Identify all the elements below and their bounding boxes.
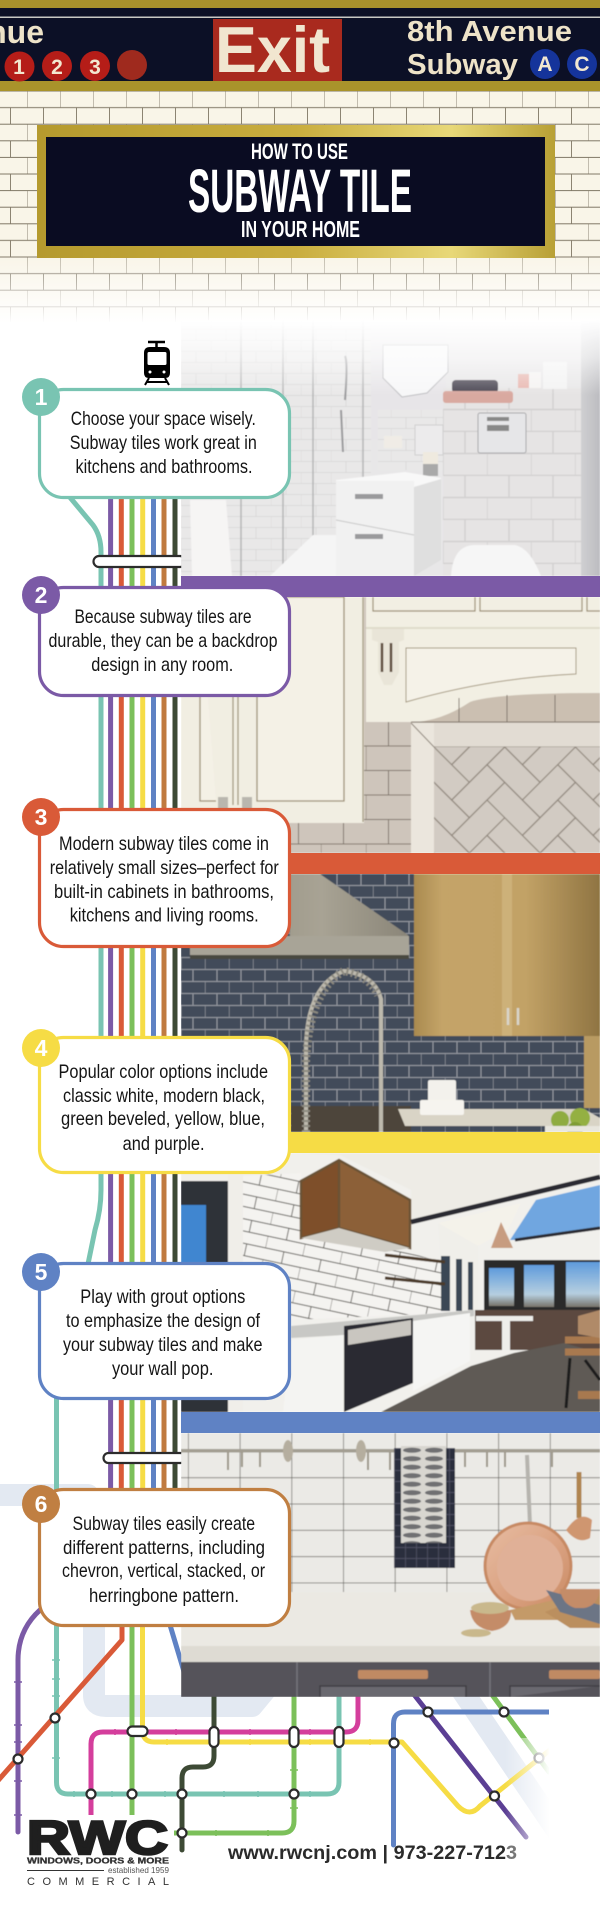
green diagonal (490, 1692, 549, 1772)
photo: bright kitchen with wood hood (181, 1153, 600, 1412)
callout 1 text: kitchens and bathrooms. (76, 456, 252, 478)
callout 6 (22, 1485, 290, 1626)
sign text: 8th Avenue Subway (407, 16, 572, 81)
callout 5 text: Play with grout options (80, 1286, 245, 1308)
route bullets A C: C (574, 53, 590, 76)
callout 4 text: green beveled, yellow, blue, (61, 1108, 265, 1130)
subway map lines (0, 495, 600, 1860)
callout 1 text (70, 408, 257, 478)
sign text: 8th Avenue Subway: 8th Avenue (407, 16, 572, 48)
blue right line (394, 1712, 549, 1845)
band: blue (181, 1412, 600, 1433)
callout 2 text (48, 606, 278, 676)
title (188, 139, 412, 242)
callout 5 text: your wall pop. (112, 1358, 213, 1380)
lower left teal loop (56, 1395, 339, 1794)
right side map fade (505, 1690, 600, 1860)
callout 5 text (63, 1286, 262, 1380)
band: red (181, 853, 600, 874)
badge 2: 2 (35, 582, 47, 608)
yellow line (142, 1620, 550, 1812)
route bullets A C (530, 49, 597, 79)
badge 5: 5 (35, 1259, 48, 1285)
panel: subway station header (0, 0, 600, 323)
callout 4 text: and purple. (123, 1133, 205, 1155)
band: purple (181, 576, 600, 597)
teal line (68, 495, 101, 1264)
badge 1: 1 (35, 384, 48, 410)
vertical line bundle (111, 495, 175, 1500)
callout 2 text: design in any room. (91, 654, 233, 676)
exit sign: Exit (215, 13, 330, 86)
photo: cream kitchen herringbone (181, 597, 600, 853)
purple left branch (18, 1610, 40, 1832)
pale map ribbons (0, 1495, 560, 1835)
route bullets 1 2 3: 1 (13, 56, 25, 79)
title: IN YOUR HOME (241, 216, 360, 242)
callout 2 text: durable, they can be a backdrop (48, 630, 278, 652)
route bullets 1 2 3: 2 (51, 56, 63, 79)
callout 6 text: Subway tiles easily create (73, 1513, 255, 1535)
title plaque (37, 125, 555, 258)
route bullets 1 2 3 (4, 50, 147, 82)
logo: RWC: WINDOWS, DOORS & MORE (27, 1856, 170, 1866)
green lower line (172, 1690, 294, 1833)
callout 3 (22, 798, 290, 946)
tiled wall background (0, 90, 600, 322)
dark green line (182, 1690, 214, 1850)
route bullets 1 2 3: 3 (89, 56, 101, 79)
callout 3 text: kitchens and living rooms. (70, 904, 259, 926)
callout 1 text: Choose your space wisely. (71, 408, 256, 430)
map tick marks (14, 1660, 370, 1836)
green vertical (130, 1620, 134, 1817)
callout 6 text: herringbone pattern. (89, 1585, 239, 1607)
callout 1 (22, 378, 290, 498)
route bullets A C: A (537, 53, 553, 76)
sign text: 8th Avenue Subway: Subway (407, 49, 518, 81)
badge 5 (22, 1253, 60, 1291)
station sign band (0, 0, 600, 91)
badge 3: 3 (35, 804, 47, 830)
callout 5 text: to emphasize the design of (66, 1310, 260, 1332)
callout 5 text: your subway tiles and make (63, 1334, 262, 1356)
callout 3 text: relatively small sizes–perfect for (50, 857, 279, 879)
callout 6 text: different patterns, including (63, 1537, 265, 1559)
callout 2 text: Because subway tiles are (74, 606, 252, 628)
logo: RWC: established 1959 (108, 1865, 169, 1875)
badge 6 (22, 1485, 60, 1523)
title: HOW TO USE (251, 139, 348, 164)
red diagonal (0, 1620, 122, 1784)
callout 4 text: classic white, modern black, (63, 1085, 265, 1107)
photo: slate subway tile kitchen (181, 874, 600, 1132)
band: yellow (181, 1132, 600, 1153)
interchange pill 1 (94, 556, 186, 567)
callout 6 text (62, 1513, 265, 1607)
callout 3 text: built-in cabinets in bathrooms, (54, 881, 274, 903)
interchange pill 2 (104, 1453, 186, 1463)
callout 3 text: Modern subway tiles come in (59, 833, 269, 855)
map stations (14, 1708, 544, 1838)
badge 2 (22, 576, 60, 614)
badge 4: 4 (35, 1035, 48, 1061)
callout 3 text (50, 833, 279, 926)
badge 1 (22, 378, 60, 416)
photo: tiled wall with copper pan (181, 1433, 600, 1697)
callout 4 (22, 1029, 290, 1172)
dark purple diagonal (412, 1692, 526, 1837)
callout 1 text: Subway tiles work great in (70, 432, 257, 454)
badge 4 (22, 1029, 60, 1067)
blue stub (170, 1625, 185, 1675)
callout 2 (22, 576, 290, 696)
photo: white bathroom (181, 332, 600, 576)
logo: RWC: RWC (27, 1811, 168, 1864)
callout 4 text (59, 1061, 268, 1155)
magenta line (91, 1690, 358, 1817)
callout 4 text: Popular color options include (59, 1061, 268, 1083)
logo: RWC: COMMERCIAL (27, 1876, 169, 1888)
callout 5 (22, 1253, 290, 1398)
logo: RWC (22, 1811, 174, 1890)
icon: train (144, 342, 170, 385)
badge 3 (22, 798, 60, 836)
title: SUBWAY TILE (188, 157, 412, 225)
contact line: www.rwcnj.com | 973-227-712 3 (227, 1843, 517, 1864)
callout 6 text: chevron, vertical, stacked, or (62, 1560, 265, 1582)
badge 6: 6 (35, 1491, 47, 1517)
